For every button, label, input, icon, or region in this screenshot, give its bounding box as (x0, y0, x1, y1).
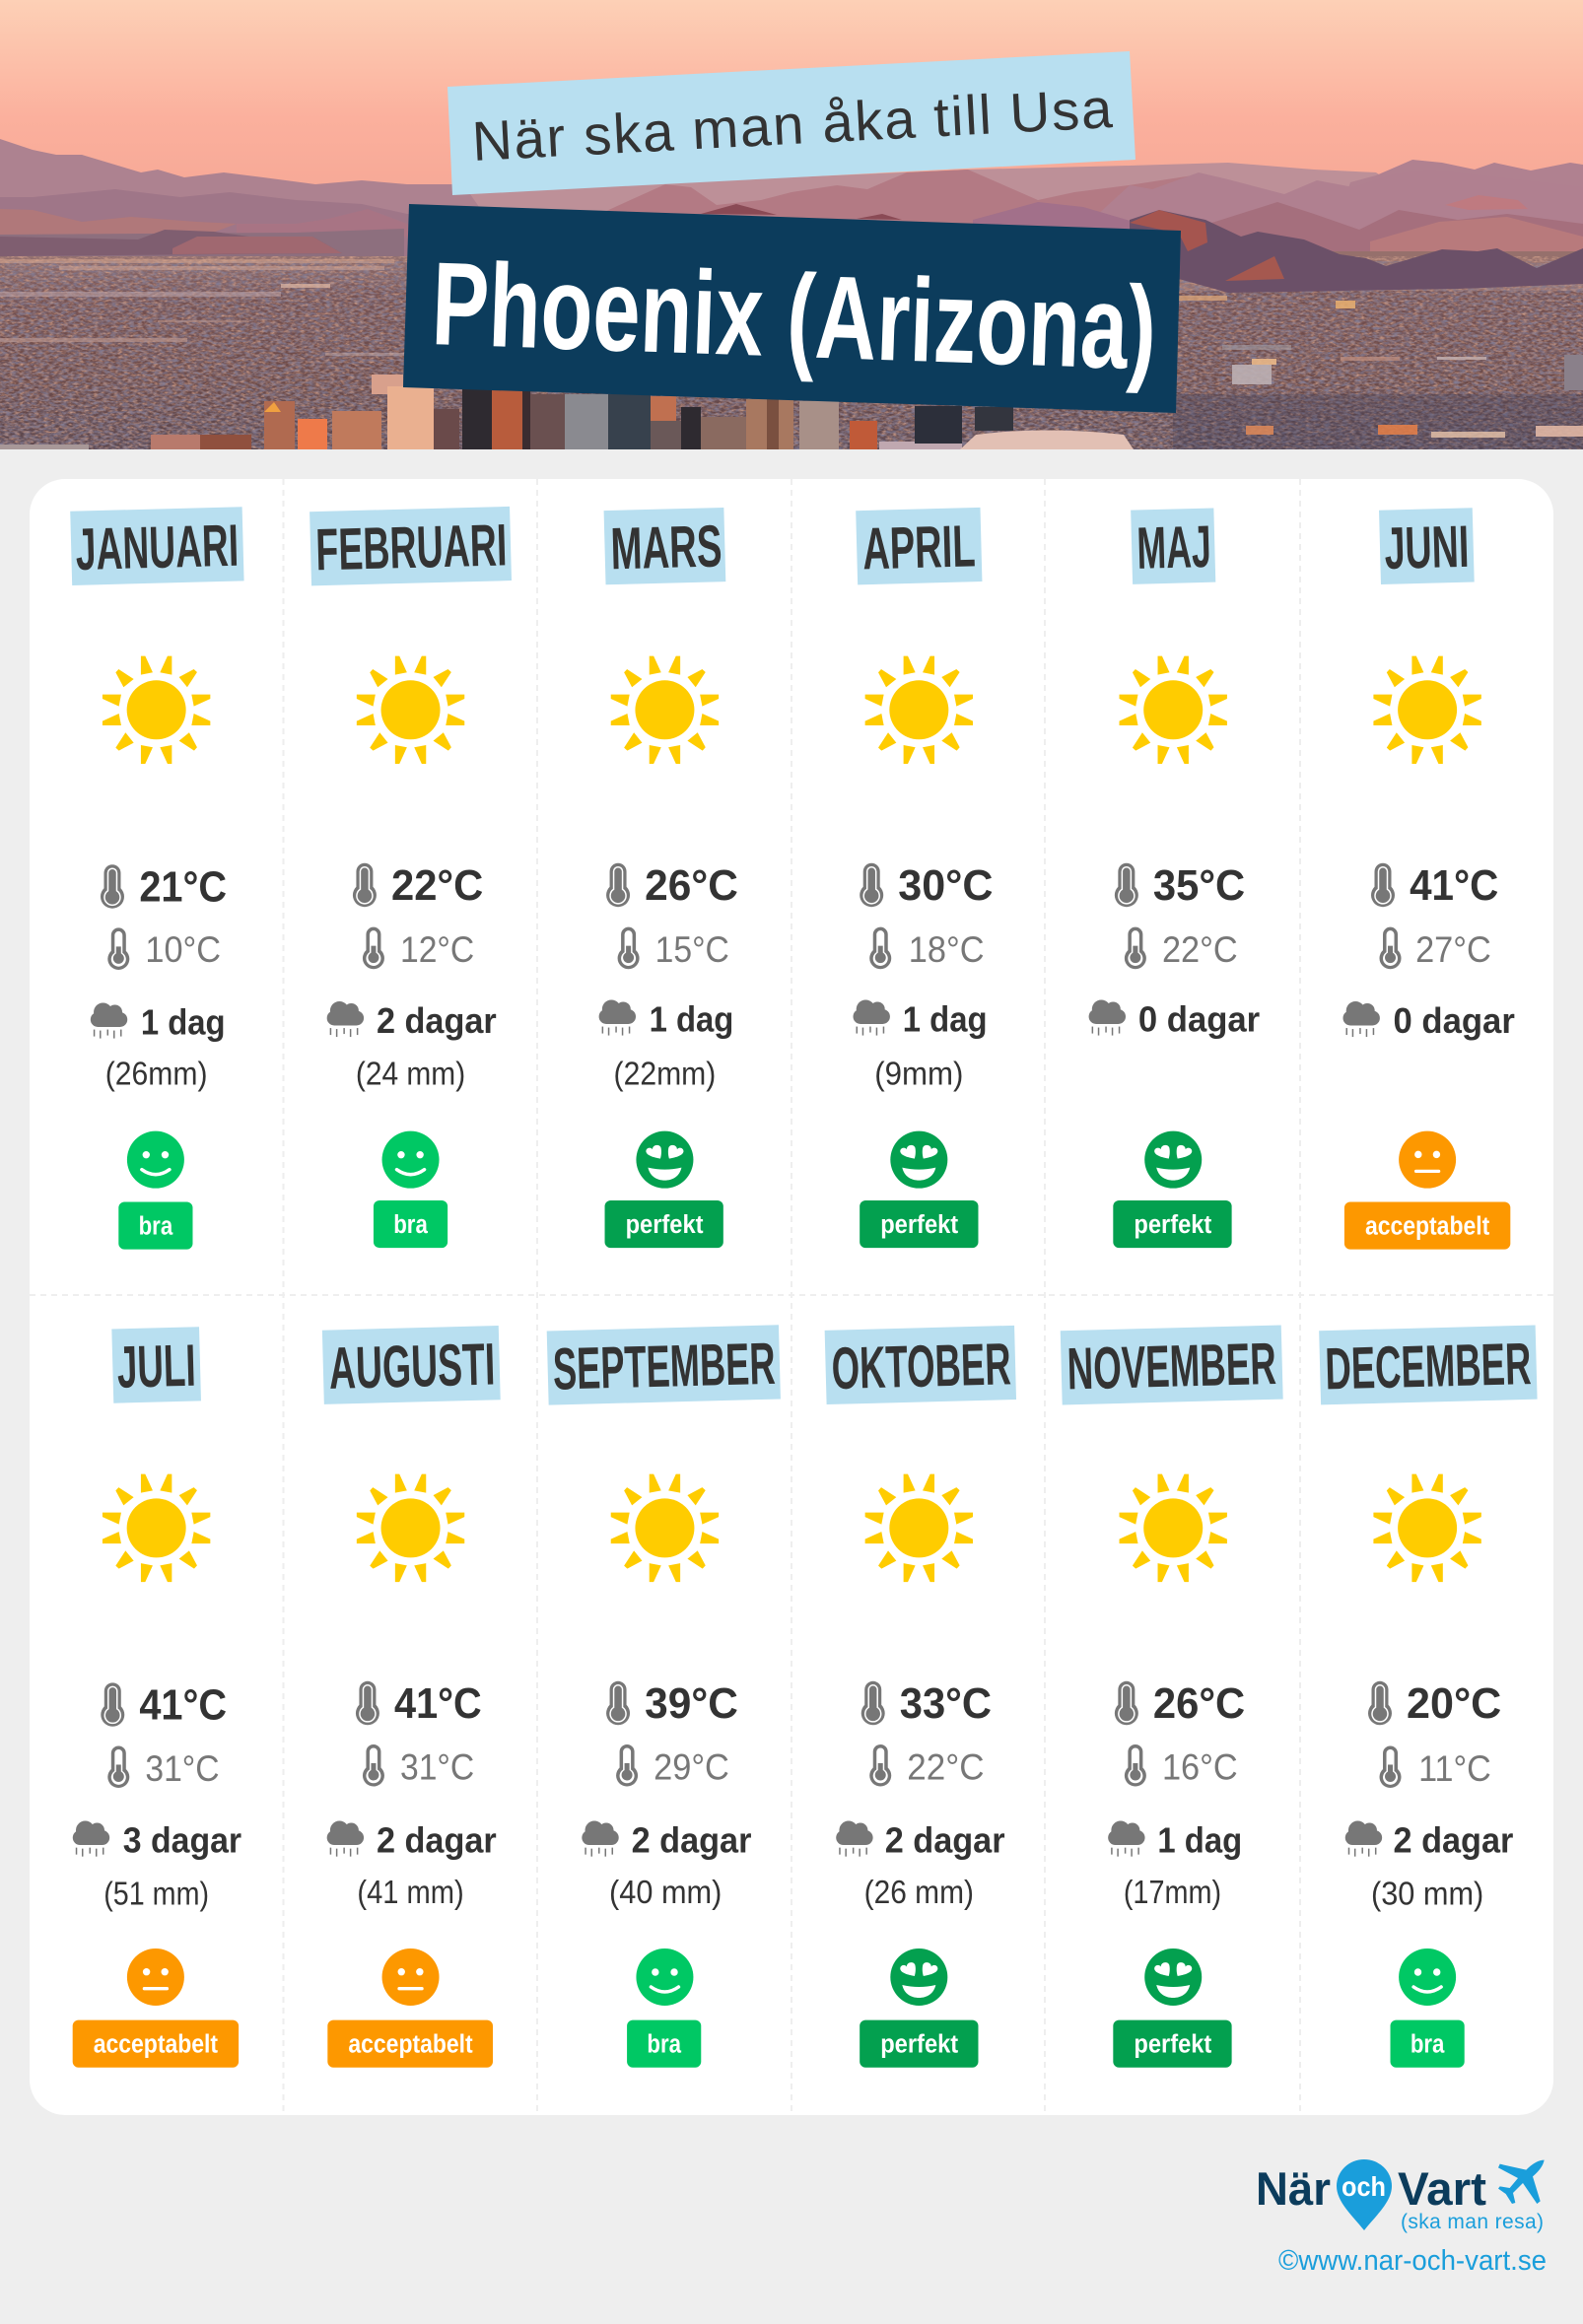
low temperature (1125, 927, 1238, 970)
rating badge: bra (1391, 2020, 1465, 2068)
heading: juli (111, 1327, 201, 1403)
month: september (547, 1325, 781, 2068)
low temperature (618, 927, 729, 970)
icon: sun (1373, 1474, 1481, 1582)
rain days (599, 999, 733, 1040)
rainfall: (24 mm) (356, 1057, 465, 1093)
heading: maj (1131, 508, 1215, 584)
rating face: perfect (890, 1948, 947, 2006)
low temperature: 22°C (1162, 929, 1238, 970)
logo: När och Vart: och (1342, 2171, 1386, 2202)
panel: monthly climate card (30, 479, 1553, 2115)
high temperature: 26°C (1153, 1680, 1245, 1728)
low temperature (1380, 1745, 1491, 1789)
icon: sun (357, 1474, 464, 1582)
low temperature (869, 927, 984, 970)
icon: sun (865, 656, 973, 764)
icon: airplane (1498, 2160, 1545, 2204)
rain days (327, 1820, 497, 1861)
heading: augusti: AUGUSTI (328, 1332, 496, 1401)
rating badge: acceptabelt: acceptabelt (1365, 1213, 1490, 1241)
rating face: acceptable (382, 1948, 440, 2006)
rain days (327, 1000, 497, 1041)
high temperature: 21°C (139, 863, 227, 911)
high temperature: 30°C (898, 862, 994, 910)
high temperature: 22°C (391, 862, 483, 910)
rainfall: (30 mm) (1371, 1876, 1483, 1912)
heading: januari: JANUARI (75, 513, 240, 582)
low temperature: 31°C (145, 1748, 220, 1789)
month: april (854, 508, 994, 1248)
heading: februari (310, 507, 512, 585)
low temperature (363, 1744, 474, 1787)
low temperature: 27°C (1415, 929, 1491, 970)
month: februari (310, 507, 512, 1248)
rain days: 1 dag (1157, 1820, 1242, 1861)
rating badge: perfekt (860, 2020, 978, 2068)
low temperature: 10°C (145, 929, 221, 970)
rating badge: bra (118, 1202, 192, 1250)
heading: mars (604, 508, 725, 584)
rainfall: (22mm) (614, 1057, 716, 1093)
rating face: perfect (1144, 1948, 1202, 2006)
high temperature (356, 1680, 482, 1728)
rating badge: acceptabelt (1344, 1202, 1510, 1250)
heading: november (1061, 1325, 1283, 1404)
low temperature: 22°C (907, 1746, 984, 1787)
rating face: perfect (636, 1131, 693, 1189)
rating badge: perfekt: perfekt (880, 1211, 959, 1239)
subtitle banner (447, 51, 1136, 195)
heading: januari (70, 507, 244, 585)
rating badge: perfekt (605, 1200, 723, 1248)
icon: sun (357, 656, 464, 764)
rating face: good (382, 1131, 440, 1189)
high temperature (101, 863, 227, 911)
month: november (1061, 1325, 1283, 2068)
rain days: 2 dagar (632, 1820, 751, 1861)
low temperature: 11°C (1418, 1748, 1491, 1789)
rainfall: (40 mm) (609, 1875, 722, 1911)
heading: april: APRIL (861, 513, 976, 581)
high temperature: 20°C (1407, 1680, 1501, 1728)
heading: oktober: OKTOBER (831, 1331, 1011, 1401)
icon: sun (611, 1474, 719, 1582)
rating face: acceptable (127, 1948, 184, 2006)
low temperature: 18°C (909, 929, 984, 970)
website credit: ©www.nar-och-vart.se (1278, 2245, 1547, 2277)
high temperature: 41°C (139, 1681, 227, 1729)
rain days (73, 1820, 241, 1861)
high temperature: 41°C (394, 1680, 482, 1728)
heading: oktober (825, 1326, 1016, 1404)
rating badge: perfekt: perfekt (626, 1211, 704, 1239)
rating badge: acceptabelt (327, 2020, 493, 2068)
high temperature (1115, 862, 1245, 910)
rain days (836, 1820, 1005, 1861)
rain days: 1 dag (141, 1002, 226, 1043)
rain days: 2 dagar (377, 1820, 497, 1861)
heading: juni: JUNI (1384, 513, 1470, 581)
heading: mars: MARS (610, 513, 723, 581)
rating badge: perfekt: perfekt (880, 2031, 959, 2059)
rain days: 0 dagar (1138, 999, 1260, 1040)
icon: sun (611, 656, 719, 764)
rain days (1342, 1000, 1515, 1041)
rain days (582, 1820, 751, 1861)
icon: map pin (1337, 2159, 1392, 2230)
rainfall: (17mm) (1124, 1875, 1221, 1911)
logo: När och Vart: Vart (1398, 2162, 1486, 2215)
rainfall: (26 mm) (864, 1875, 974, 1911)
low temperature (1380, 927, 1491, 970)
rating badge: perfekt (860, 1200, 978, 1248)
high temperature: 26°C (645, 862, 738, 910)
heading: september: SEPTEMBER (552, 1331, 776, 1402)
rain days (1089, 999, 1260, 1040)
rating badge: perfekt: perfekt (1134, 1211, 1212, 1239)
month: oktober (825, 1326, 1016, 2068)
icon: sun (865, 1474, 973, 1582)
heading: april (856, 508, 982, 584)
month: augusti (322, 1326, 501, 2068)
month: maj (1089, 508, 1260, 1248)
icon: sun (103, 656, 210, 764)
rating face: good (127, 1131, 184, 1189)
header photo: Phoenix skyline at sunset (0, 0, 1583, 449)
rain days: 2 dagar (1394, 1820, 1513, 1861)
rain days (91, 1002, 226, 1043)
rating face: good (1399, 1948, 1456, 2006)
high temperature (861, 1680, 992, 1728)
low temperature: 31°C (400, 1746, 474, 1787)
low temperature: 15°C (655, 929, 729, 970)
high temperature: 33°C (900, 1680, 992, 1728)
heading: juli: JULI (116, 1333, 196, 1401)
month: juli (73, 1327, 241, 2068)
rainfall: (41 mm) (357, 1875, 464, 1911)
rating badge: perfekt (1113, 2020, 1232, 2068)
logo: När och Vart (1256, 2159, 1545, 2233)
rain days (1108, 1820, 1242, 1861)
rating face: good (636, 1948, 693, 2006)
heading: maj: MAJ (1136, 513, 1211, 581)
rainfall: (51 mm) (103, 1876, 209, 1912)
low temperature (1125, 1744, 1238, 1787)
rain days: 1 dag (903, 999, 987, 1040)
heading: november: NOVEMBER (1067, 1331, 1277, 1402)
rating badge: bra: bra (139, 1213, 173, 1241)
rainfall: (26mm) (105, 1057, 208, 1093)
icon: sun (103, 1474, 210, 1582)
rain days: 3 dagar (123, 1820, 241, 1861)
heading: februari: FEBRUARI (314, 512, 508, 582)
high temperature (606, 1680, 738, 1728)
high temperature (101, 1681, 227, 1729)
rating badge: bra: bra (1411, 2031, 1445, 2059)
title banner: Phoenix (Arizona) (430, 238, 1158, 395)
subtitle banner: När ska man åka till Usa (470, 77, 1114, 172)
rain days (854, 999, 987, 1040)
high temperature (353, 862, 483, 910)
icon: sun (1120, 656, 1227, 764)
high temperature (1371, 862, 1498, 910)
rain days: 0 dagar (1394, 1000, 1515, 1041)
icon: sun (1373, 656, 1481, 764)
month: januari (70, 507, 244, 1250)
icon: sun (1120, 1474, 1227, 1582)
high temperature (606, 862, 738, 910)
rating badge: bra (374, 1200, 447, 1248)
rating badge: acceptabelt (73, 2020, 239, 2068)
low temperature: 16°C (1162, 1746, 1238, 1787)
month: mars (599, 508, 738, 1248)
rating face: perfect (1144, 1131, 1202, 1189)
rating face: perfect (890, 1131, 947, 1189)
low temperature (616, 1744, 729, 1787)
heading: augusti (322, 1326, 501, 1404)
title banner (403, 204, 1181, 413)
rating badge: bra: bra (647, 2031, 682, 2059)
low temperature (869, 1744, 984, 1787)
rain days: 2 dagar (885, 1820, 1005, 1861)
rating badge: perfekt: perfekt (1134, 2031, 1212, 2059)
logo: När och Vart: (ska man resa) (1401, 2211, 1544, 2233)
rain days: 2 dagar (377, 1000, 497, 1041)
rating badge: bra (627, 2020, 701, 2068)
heading: september (547, 1325, 781, 1405)
high temperature: 39°C (645, 1680, 738, 1728)
high temperature (1115, 1680, 1245, 1728)
rainfall: (9mm) (874, 1057, 963, 1093)
low temperature (107, 927, 221, 970)
low temperature: 12°C (400, 929, 474, 970)
month: juni (1342, 508, 1515, 1250)
heading: juni (1379, 508, 1475, 584)
rain days (1345, 1820, 1513, 1861)
rating badge: acceptabelt: acceptabelt (94, 2031, 218, 2059)
low temperature (363, 927, 474, 970)
logo: När och Vart: När (1256, 2162, 1331, 2215)
rating badge: bra: bra (393, 1211, 429, 1239)
rain days: 1 dag (650, 999, 733, 1040)
high temperature: 35°C (1153, 862, 1245, 910)
rating face: acceptable (1399, 1131, 1456, 1189)
low temperature: 29°C (654, 1746, 729, 1787)
rating badge: perfekt (1113, 1200, 1232, 1248)
rating badge: acceptabelt: acceptabelt (348, 2031, 473, 2059)
month: december (1319, 1325, 1538, 2068)
high temperature: 41°C (1410, 862, 1498, 910)
low temperature (107, 1745, 220, 1789)
